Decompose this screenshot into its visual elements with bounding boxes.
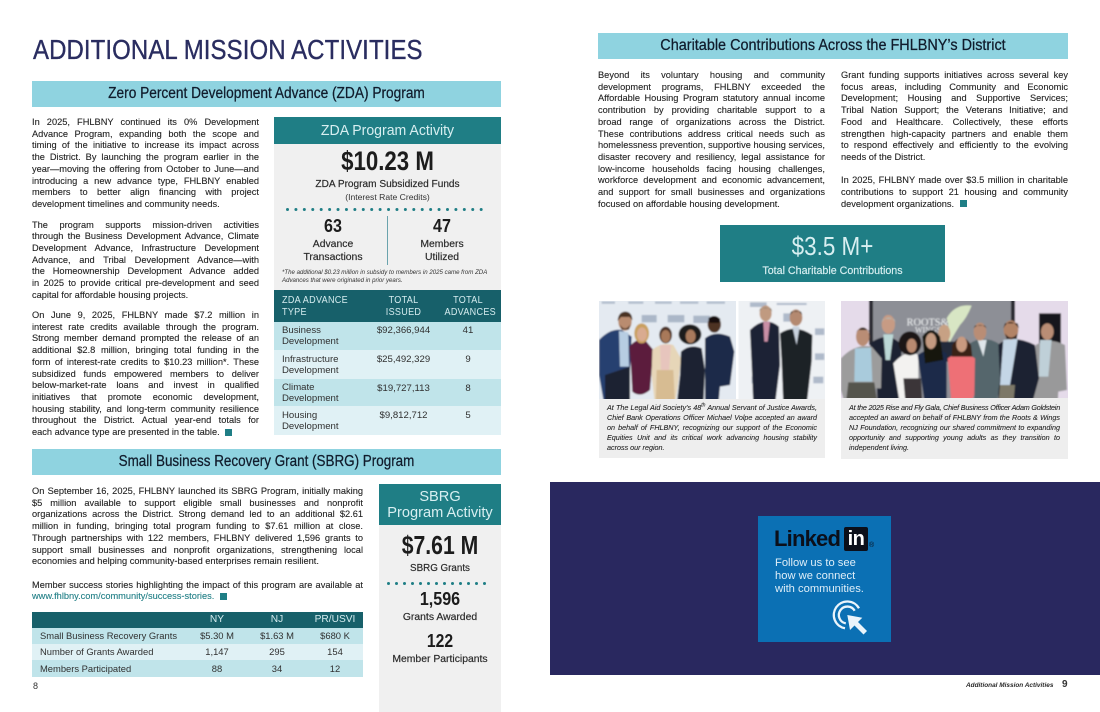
photo: Rise and Fly Gala: ROOTS&: [907, 318, 949, 329]
text block: SBRG paragraph 2: [32, 580, 363, 601]
text block: SBRG paragraph 1: million in funding, bringing total program funding to $7.61 million at close.: [32, 521, 363, 531]
text block: ZDA paragraph 1: In 2025, FHLBNY continued its 0% Development: [32, 117, 259, 127]
text block: ZDA paragraph 2: capital for affordable housing projects.: [32, 290, 188, 300]
stat: members utilized: [420, 215, 464, 263]
text block: ZDA paragraph 3: form of interest-rate credits to $10.23 million*. These: [32, 357, 259, 367]
text block: ZDA paragraph 2: [32, 220, 259, 300]
row: number of grants: 1,147: [205, 646, 229, 657]
text block: charitable column 1: disaster recovery and resiliency, legal assistance for: [598, 152, 825, 162]
table header: TYPE: [282, 307, 307, 318]
text block: charitable column 2: needs of the District.: [841, 152, 925, 162]
text block: charitable column 1: contribution by providing charitable support to a: [598, 105, 825, 115]
text block: ZDA paragraph 3: additional $2.8 million, bringing total funding in the: [32, 345, 259, 355]
photo caption: NJ Foundation, recognizing our shared commitment to expanding: [849, 422, 1060, 432]
text block: charitable column 1: Affordable Housing Program statutory annual income: [598, 93, 825, 103]
photo caption: independent living.: [849, 442, 909, 452]
row: members participated: 34: [272, 663, 282, 674]
panel: SBRG program activity: [379, 484, 501, 712]
row: number of grants: 295: [269, 646, 285, 657]
text block: ZDA paragraph 3: initiatives that promote economic development,: [32, 392, 259, 402]
panel: Roots and Wings photo card: [841, 301, 1068, 459]
panel: ZDA program activity: [274, 117, 501, 435]
text block: ZDA paragraph 1: members to better align financing with project: [32, 187, 259, 197]
person 2: [629, 340, 653, 395]
person 3: [893, 353, 922, 405]
text block: SBRG paragraph 1: [32, 486, 363, 566]
text block: charitable column 1: low-income households facing housing challenges,: [598, 164, 825, 174]
text block: charitable column 1: broad range of organizations across the District.: [598, 117, 825, 127]
text block: SBRG paragraph 1: $5 million available to support eligible small businesses and nonprofit: [32, 498, 363, 508]
wordmark: Linked: [774, 526, 840, 551]
text block: ZDA paragraph 1: [32, 117, 259, 209]
text block: ZDA paragraph 3: subsidized funds empowered members to deliver: [32, 369, 259, 379]
heading: ZDA program band: Zero Percent Development Advance (ZDA) Program: [108, 85, 425, 102]
table header: ISSUED: [386, 307, 421, 318]
text block: charitable column 2: Food and Healthcare. Collectively, these efforts: [841, 117, 1068, 127]
text block: charitable column 2: focus areas, including Community and Economic: [841, 82, 1068, 92]
table header: [274, 290, 501, 322]
text block: ZDA paragraph 3: interest rate credits available through the program.: [32, 322, 259, 332]
row: infrastructure development: 9: [465, 354, 471, 364]
photo caption: Equities Unit and its critical work advancing housing stability: [607, 432, 817, 442]
photo: Legal Aid Society award: [599, 301, 825, 399]
text block: ZDA paragraph 3: [32, 310, 259, 437]
footnote: Advances that were originated in prior years.: [282, 277, 403, 284]
photo caption: opportunity and supporting young adults as they transition to: [849, 432, 1060, 442]
panel header: Program Activity: [387, 505, 493, 521]
table: SBRG by region: [32, 612, 363, 677]
person 3: [652, 344, 681, 405]
row: number of grants: 154: [327, 646, 343, 657]
text block: charitable column 2: development organizations.: [841, 199, 954, 209]
text block: charitable column 2: strengthen high-capacity partners and enable them: [841, 129, 1068, 139]
stat: grants awarded number: 1,596: [420, 588, 460, 609]
text block: ZDA paragraph 2: Advance, and Tribal Development Advance—with: [32, 255, 259, 265]
page number 9: 9: [1062, 679, 1068, 690]
text block: charitable column 2: Development; Housing and Supportive Services;: [841, 93, 1068, 103]
callout: total charitable contributions: [720, 225, 945, 282]
row: members participated: [32, 660, 363, 677]
table header: ZDA ADVANCE: [282, 295, 348, 306]
page number 8: 8: [33, 681, 38, 691]
text block: ZDA paragraph 2: Development Advance, Infrastructure Development: [32, 243, 259, 253]
heading: SBRG program band: Small Business Recovery Grant (SBRG) Program: [119, 453, 414, 470]
person 7: [780, 329, 812, 405]
text block: charitable column 1: development programs, FHLBNY exceeded the: [598, 82, 825, 92]
stat sublabel: (Interest Rate Credits): [345, 192, 430, 202]
panel header: [274, 117, 501, 144]
row: climate development: Climate: [282, 382, 315, 393]
stat: SBRG grants: $7.61 M: [402, 532, 478, 560]
person 4: [677, 346, 705, 405]
photo caption: At The Legal Aid Society’s 48th Annual Servant of Justice Awards,: [607, 402, 817, 412]
row: housing development: [274, 406, 501, 435]
label: [303, 239, 363, 263]
row: housing development: Development: [282, 420, 339, 432]
person 1: [599, 330, 632, 405]
photo: Rise and Fly Gala: WINGS: [915, 325, 941, 334]
text block: SBRG paragraph 1: support small businesses and nonprofit organizations, strengthening local: [32, 545, 363, 555]
text block: SBRG paragraph 1: economies and helping community-based enterprises remain resilient.: [32, 556, 319, 566]
follow text: Follow us to see: [775, 556, 856, 568]
text block: ZDA paragraph 2: in 2025 to provide critical pre-development and seed: [32, 278, 259, 288]
row: members participated: Members Participated: [40, 663, 131, 674]
text block: ZDA paragraph 1: Advance Program, expanding both the scope and: [32, 129, 259, 139]
panel header: SBRG: [419, 489, 461, 505]
text block: charitable column 1: [598, 70, 826, 209]
text block: ZDA paragraph 3: throughout the District. Actual year-end totals for: [32, 415, 259, 425]
row: business development: Business: [282, 325, 321, 336]
text block: charitable column 1: These contributions address critical needs such as: [598, 129, 825, 139]
footer: section name: Additional Mission Activities: [966, 682, 1053, 688]
text block: charitable column 1: workforce development and economic advancement,: [598, 175, 825, 185]
follow text: how we connect: [775, 570, 855, 582]
text block: charitable column 1: and support for small businesses and organizations: [598, 187, 825, 197]
row: members participated: 88: [212, 663, 222, 674]
text block: charitable column 2: In 2025, FHLBNY made over $3.5 million in charitable: [841, 175, 1068, 185]
heading: SBRG program band: [32, 449, 501, 475]
photo caption: [606, 402, 818, 452]
stat label: Member Participants: [392, 654, 488, 665]
label: [420, 239, 464, 263]
text block: ZDA paragraph 3: Strong member demand prompted the release of an: [32, 333, 259, 343]
text block: charitable column 2: [841, 70, 1068, 209]
photo caption: across our region.: [607, 442, 665, 452]
row: climate development: $19,727,113: [377, 382, 430, 394]
row: grants: Small Business Recovery Grants: [40, 630, 177, 641]
person 5: [705, 334, 734, 405]
table header: NJ: [271, 614, 283, 625]
text block: ZDA paragraph 3: below-market-rate loans and invest in qualified: [32, 380, 259, 390]
photo caption: At the 2025 Rise and Fly Gala, Chief Business Officer Adam Goldstein: [849, 402, 1060, 412]
callout value: $3.5 M+: [792, 233, 873, 261]
LinkedIn logo: [774, 526, 874, 551]
callout label: Total Charitable Contributions: [762, 265, 903, 277]
heading: ZDA program band: [32, 81, 501, 107]
person 7: [970, 339, 1000, 405]
row: business development: [274, 322, 501, 350]
text block: ZDA paragraph 2: through the Business Development Advance, Climate: [32, 231, 259, 241]
text block: ZDA paragraph 3: On June 9, 2025, FHLBNY made $7.2 million in: [32, 310, 259, 320]
text block: SBRG paragraph 1: Through partnerships with 122 members, FHLBNY delivered 1,596 grants to: [32, 533, 363, 543]
photo caption: Chief Bank Operations Officer Michael Volpe accepted an award: [607, 412, 817, 422]
text block: ZDA paragraph 3: housing stability, and long-term community resilience: [32, 404, 259, 414]
person 2: [870, 337, 902, 405]
table: ZDA advance types: [274, 290, 501, 435]
text block: charitable column 1: Beyond its voluntary housing and community: [598, 70, 825, 80]
label: Members: [420, 239, 464, 250]
stat: advance transactions: [303, 215, 363, 263]
stat label: SBRG Grants: [410, 563, 470, 574]
stat: subsidized funds: $10.23 M: [341, 146, 434, 176]
row: climate development: Development: [282, 393, 339, 404]
footnote: [282, 269, 487, 284]
row: infrastructure development: [274, 350, 501, 379]
row: infrastructure development: Development: [282, 364, 339, 376]
row: housing development: Housing: [282, 410, 317, 420]
photo: Rise and Fly Gala: [841, 301, 1068, 398]
follow text: with communities.: [775, 582, 864, 594]
text block: ZDA paragraph 1: introducing a new advance type, FHLBNY enabled: [32, 176, 259, 186]
row: grants: $680 K: [320, 630, 350, 641]
number 63: 63: [324, 215, 342, 236]
text block: ZDA paragraph 2: The program supports mission-driven activities: [32, 220, 259, 230]
person 4: [918, 350, 947, 405]
row: business development: 41: [463, 325, 473, 336]
row: grants: $5.30 M: [200, 630, 234, 641]
text block: charitable column 2: to respond effectively and efficiently to the evolving: [841, 140, 1068, 150]
row: climate development: [274, 379, 501, 406]
row: number of grants: [32, 644, 363, 660]
row: members participated: 12: [330, 663, 340, 674]
photo caption: [848, 402, 1060, 452]
text block: charitable column 2: Grant funding supports initiatives across several key: [841, 70, 1068, 80]
text block: ZDA paragraph 3: each advance type are presented in the table.: [32, 427, 220, 437]
label: Utilized: [425, 252, 459, 263]
in badge: [844, 527, 868, 551]
text block: SBRG paragraph 2: www.fhlbny.com/community/success-stories.: [32, 591, 214, 601]
person 5 back: [938, 325, 950, 342]
panel: Legal Aid Society photo card: [599, 301, 825, 458]
footnote: *The additional $0.23 million in subsidy to members in 2025 came from ZDA: [282, 269, 487, 276]
photo caption: accepted an award on behalf of FHLBNY from the Roots & Wings: [849, 412, 1060, 422]
stat: member participants number: 122: [427, 630, 453, 651]
title: ADDITIONAL MISSION ACTIVITIES: [33, 34, 423, 65]
in badge: in: [848, 528, 864, 550]
row: grants: $1.63 M: [260, 630, 294, 641]
row: business development: $92,366,944: [377, 325, 430, 336]
text block: SBRG paragraph 1: On September 16, 2025, FHLBNY launched its SBRG Program, initially making: [32, 486, 363, 496]
column divider: [387, 216, 388, 265]
text block: ZDA paragraph 2: the Homeownership Development Advance added: [32, 266, 259, 276]
table header: [32, 612, 363, 628]
row: housing development: 5: [465, 410, 471, 420]
text block: charitable column 1: focused on affordable housing development.: [598, 199, 780, 209]
registered mark: ®: [869, 542, 874, 549]
table header: NY: [210, 614, 224, 625]
heading: charitable contributions band: [598, 33, 1068, 59]
label: Transactions: [303, 252, 363, 263]
row: climate development: 8: [465, 382, 471, 394]
person 6: [750, 322, 780, 405]
panel: navy LinkedIn banner: [550, 482, 1100, 675]
person 9: [1032, 341, 1067, 405]
row: grants: [32, 628, 363, 644]
number 47: 47: [433, 215, 451, 236]
panel header: [379, 484, 501, 525]
divider dots: [387, 582, 486, 585]
text block: charitable column 1: homelessness prevention, supportive housing services,: [598, 140, 825, 150]
table header: TOTAL: [389, 295, 418, 306]
table header: PR/USVI: [315, 614, 355, 625]
text block: ZDA paragraph 1: timing of the initiative to increase its impact across: [32, 140, 259, 150]
row: infrastructure development: $25,492,329: [377, 354, 430, 364]
label: Advance: [313, 239, 353, 250]
person 6: [948, 353, 975, 405]
divider dots: [286, 208, 483, 211]
text block: charitable column 2: contributions to support 21 housing and community: [841, 187, 1068, 197]
panel header: ZDA Program Activity: [321, 122, 454, 139]
heading: charitable contributions band: Charitable Contributions Across the FHLBNY’s District: [660, 37, 1006, 54]
text block: ZDA paragraph 1: development timelines and community needs.: [32, 199, 220, 209]
follow text: [775, 556, 864, 594]
table header: TOTAL: [453, 295, 483, 306]
table header: ADVANCES: [445, 307, 496, 318]
LinkedIn card: [758, 516, 891, 642]
person 8: [998, 339, 1039, 405]
text block: SBRG paragraph 2: Member success stories highlighting the impact of this program are available at: [32, 580, 363, 590]
row: business development: Development: [282, 336, 339, 347]
row: number of grants: Number of Grants Awarded: [40, 646, 153, 657]
row: housing development: $9,812,712: [379, 410, 428, 420]
person 1: [841, 346, 882, 405]
text block: charitable column 2: Tribal Nation Support; the Veterans Initiative; and: [841, 105, 1068, 115]
stat label: Grants Awarded: [403, 612, 477, 623]
stat label: ZDA Program Subsidized Funds: [315, 179, 460, 190]
icon: click cursor: [832, 600, 867, 634]
row: infrastructure development: Infrastructure: [282, 354, 339, 364]
photo caption: on behalf of FHLBNY, recognizing our support of the Economic: [607, 422, 817, 432]
text block: ZDA paragraph 1: year—moving the offering from October to June—and: [32, 164, 259, 174]
text block: ZDA paragraph 1: the District. By launching the program earlier in the: [32, 152, 259, 162]
text block: SBRG paragraph 1: organizations across the District. Strong demand led to an additional $2.61: [32, 509, 363, 519]
